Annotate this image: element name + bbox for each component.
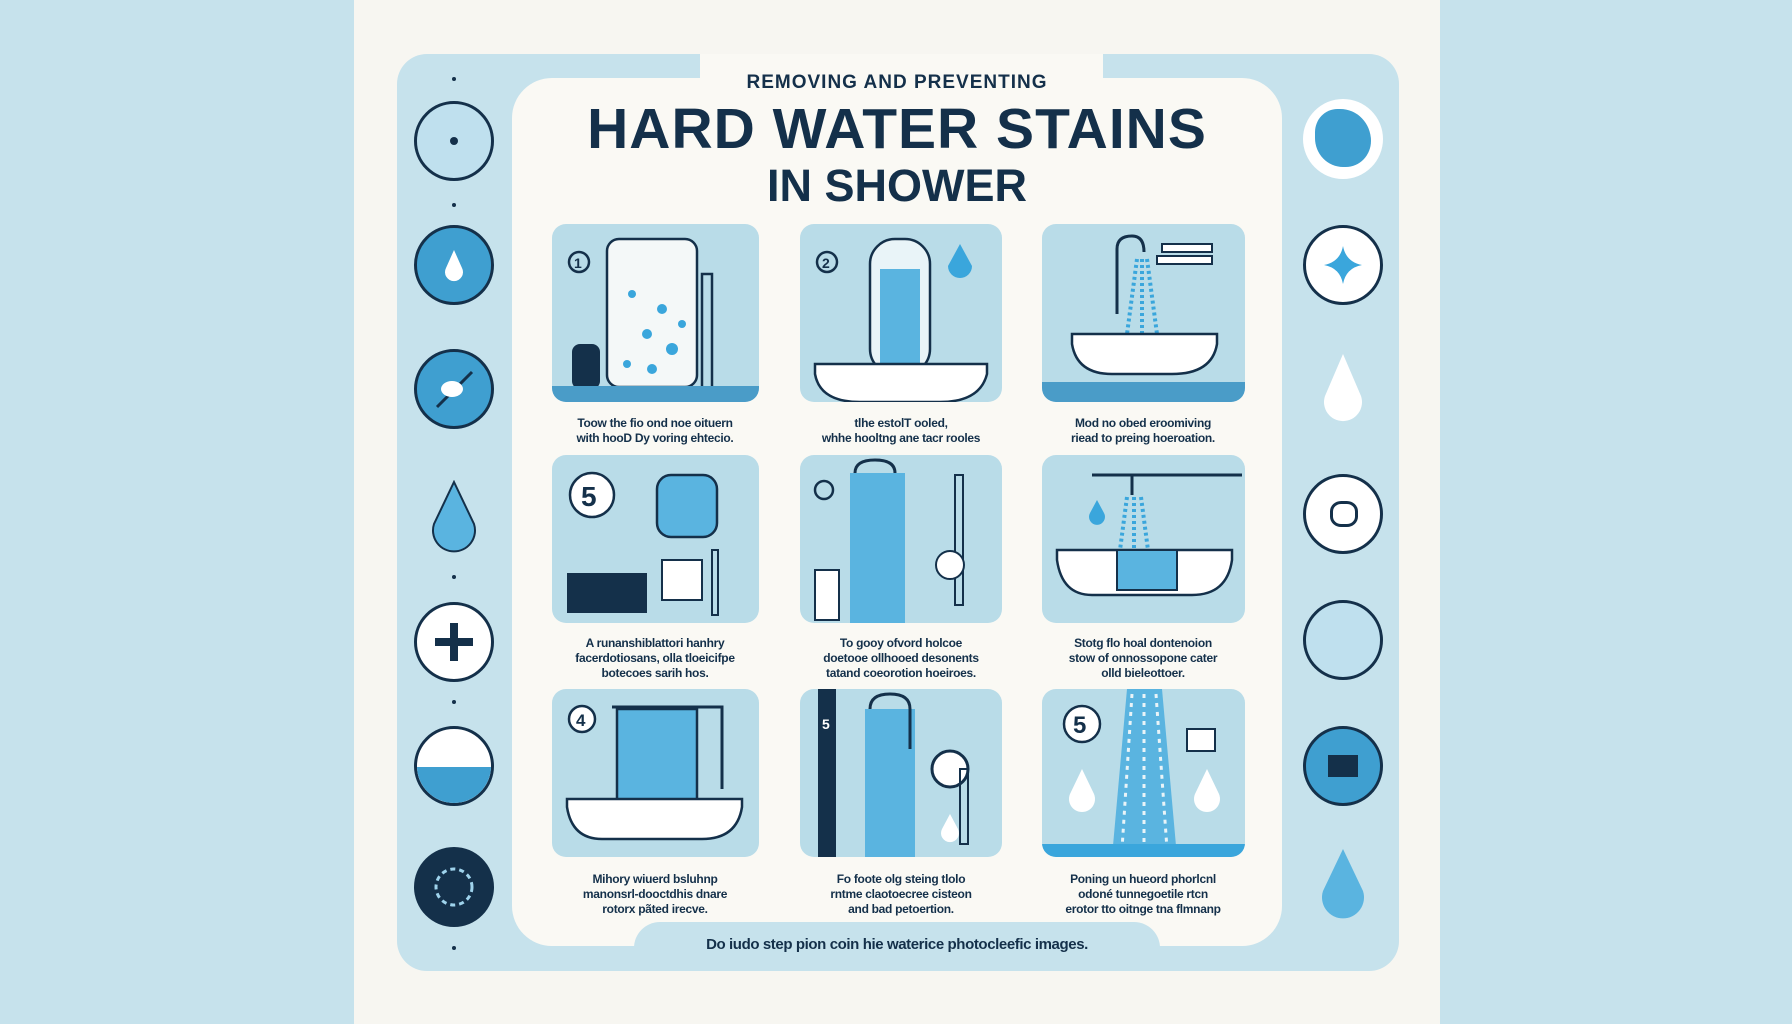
caption 6: Stotg flo hoal dontenoion (1074, 636, 1212, 650)
title block: HARD WATER STAINS (587, 97, 1207, 161)
icon: water level (414, 726, 494, 806)
panel 6 (1042, 455, 1245, 623)
panel 3 (1042, 224, 1245, 402)
panel 8 (800, 689, 1002, 857)
bottom note band: Do iudo step pion coin hie waterice photocleefic images. (706, 936, 1088, 953)
caption 5: doetooe ollhooed desonents (823, 651, 979, 665)
icon: gauge (414, 101, 494, 181)
white card (512, 78, 1282, 946)
icon: puzzle (1303, 726, 1383, 806)
caption 7: rotorx pãted irecve. (602, 902, 708, 916)
panel 2: 2 (822, 255, 830, 271)
caption 2: tlhe estolT ooled, (854, 416, 948, 430)
caption 9: odoné tunnegoetile rtcn (1078, 887, 1208, 901)
panel 9: 5 (1073, 712, 1086, 739)
caption 7: manonsrl-dooctdhis dnare (583, 887, 727, 901)
blue frame panel (397, 54, 1399, 971)
panel 4 (552, 455, 759, 623)
icon: water drop (1324, 354, 1362, 422)
caption 5: tatand coeorotion hoeiroes. (826, 666, 976, 680)
caption 3: Mod no obed eroomiving (1075, 416, 1211, 430)
caption 2: whhe hooltng ane tacr rooles (822, 431, 980, 445)
caption 8: and bad petoertion. (848, 902, 954, 916)
caption 7 (583, 872, 727, 916)
panel 9 (1042, 689, 1245, 857)
caption 6 (1069, 636, 1218, 680)
background center column (354, 0, 1440, 1024)
caption 6: olld bieleottoer. (1101, 666, 1185, 680)
right icon column (1303, 99, 1383, 918)
panel 5 (800, 455, 1002, 623)
title block: REMOVING AND PREVENTING (746, 72, 1048, 93)
icon: speckled disc (1303, 600, 1383, 680)
icon: water drop (1322, 849, 1364, 918)
icon: plus (414, 602, 494, 682)
caption 7: Mihory wiuerd bsluhnp (592, 872, 718, 886)
caption 1 (576, 416, 733, 445)
panel 1 (552, 224, 759, 402)
caption 5 (823, 636, 979, 680)
caption 3: riead to preing hoeroation. (1071, 431, 1215, 445)
caption 8: rntme claotoecree cisteon (830, 887, 972, 901)
caption 4: facerdotiosans, olla tloeicifpe (575, 651, 735, 665)
caption 3 (1071, 416, 1215, 445)
caption 4: A runanshiblattori hanhry (586, 636, 724, 650)
icon: sparkle (1303, 225, 1383, 305)
caption 9: erotor tto oitnge tna flmnanp (1065, 902, 1221, 916)
bottom note band (634, 922, 1160, 968)
panel 4: 5 (581, 481, 597, 512)
icon: blob (1303, 99, 1383, 179)
icon: circle badge (1303, 474, 1383, 554)
left icon column (414, 77, 494, 950)
caption 4 (575, 636, 735, 680)
caption 4: botecoes sarih hos. (602, 666, 708, 680)
panel 7 (552, 689, 759, 857)
caption 6: stow of onnossopone cater (1069, 651, 1217, 665)
caption 1: Toow the fio ond noe oituern (577, 416, 733, 430)
caption 9 (1065, 872, 1221, 916)
panel 8: 5 (822, 716, 830, 732)
caption 1: with hooD Dy voring ehtecio. (577, 431, 733, 445)
caption 2 (822, 416, 980, 445)
title block (587, 72, 1207, 211)
panel 2 (800, 224, 1002, 402)
caption 8: Fo foote olg steing tlolo (837, 872, 965, 886)
icon: drop circle (414, 225, 494, 305)
caption 5: To gooy ofvord holcoe (840, 636, 962, 650)
caption 8 (830, 872, 972, 916)
icon: water drop (432, 480, 476, 552)
icon: filter (414, 847, 494, 927)
panel 1: 1 (574, 255, 582, 271)
panel 7: 4 (576, 711, 586, 730)
icon: no symbol (414, 349, 494, 429)
title block: IN SHOWER (767, 160, 1027, 211)
caption 9: Poning un hueord phorlcnl (1070, 872, 1216, 886)
